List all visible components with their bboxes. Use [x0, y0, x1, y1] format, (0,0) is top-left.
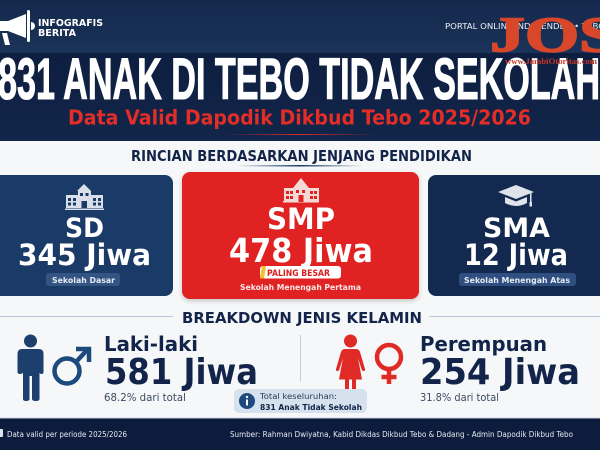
male stats: Laki-laki — [104, 332, 198, 356]
SMP label: SMP — [267, 202, 335, 236]
portal tagline: PORTAL ONLINE INDEPENDEN • TEBO — [445, 22, 600, 31]
male stats: 68.2% dari total — [104, 392, 186, 404]
heading: jenjang pendidikan: RINCIAN BERDASARKAN JENJANG PENDIDIKAN — [131, 147, 472, 165]
SMA value: 12 Jiwa — [464, 238, 568, 272]
logo text: BERITA — [38, 28, 77, 39]
female stats: Perempuan — [420, 332, 547, 356]
badge: paling besar — [260, 266, 341, 279]
footer validity note: Data valid per periode 2025/2026 — [7, 430, 127, 439]
icon: male figure — [18, 334, 44, 401]
SD value: 345 Jiwa — [18, 238, 151, 272]
icon: megaphone logo — [0, 10, 35, 45]
heading: jenis kelamin: BREAKDOWN JENIS KELAMIN — [182, 309, 422, 327]
panel: SD — [0, 175, 173, 296]
divider — [300, 335, 301, 382]
panel: footer — [0, 418, 600, 450]
SMA pill — [459, 273, 576, 286]
panel: header — [0, 0, 600, 141]
female stats — [420, 332, 580, 404]
callout: total — [234, 389, 367, 413]
callout: total: Total keseluruhan: — [259, 392, 337, 401]
panel: SMP — [182, 172, 419, 299]
logo text: INFOGRAFIS — [38, 18, 103, 29]
watermark: JOS: JOS — [490, 6, 600, 62]
female stats: 31.8% dari total — [420, 392, 499, 404]
logo text — [38, 18, 103, 39]
SD label: SD — [65, 213, 104, 244]
badge: paling besar: PALING BESAR — [267, 269, 330, 279]
icon: footer calendar — [0, 429, 3, 437]
icon: female figure — [336, 334, 365, 389]
SD pill: Sekolah Dasar — [52, 276, 115, 285]
watermark: JOS: www.JambiOtoritas.com — [505, 57, 597, 66]
SMP value: 478 Jiwa — [229, 231, 373, 270]
icon: male symbol — [54, 349, 89, 384]
SD pill — [46, 273, 120, 286]
footer source: Sumber: Rahman Dwiyatna, Kabid Dikdas Dikbud Tebo & Dadang - Admin Dapodik Dikbud Tebo — [230, 430, 573, 439]
female stats: 254 Jiwa — [420, 352, 580, 393]
callout: total: 831 Anak Tidak Sekolah — [260, 403, 362, 412]
subtitle: Data Valid Dapodik Dikbud Tebo 2025/2026 — [68, 106, 531, 130]
SMP caption: Sekolah Menengah Pertama — [240, 283, 361, 292]
SMA pill: Sekolah Menengah Atas — [464, 276, 570, 285]
male stats — [104, 332, 258, 404]
SMA label: SMA — [483, 213, 550, 244]
icon: female symbol — [377, 345, 401, 384]
icon: info — [239, 393, 255, 409]
male stats: 581 Jiwa — [105, 352, 258, 393]
panel: SMA — [428, 175, 600, 296]
icon: graduation cap — [498, 185, 534, 206]
icon: school SMP — [283, 178, 319, 202]
icon: school SD — [65, 184, 104, 210]
